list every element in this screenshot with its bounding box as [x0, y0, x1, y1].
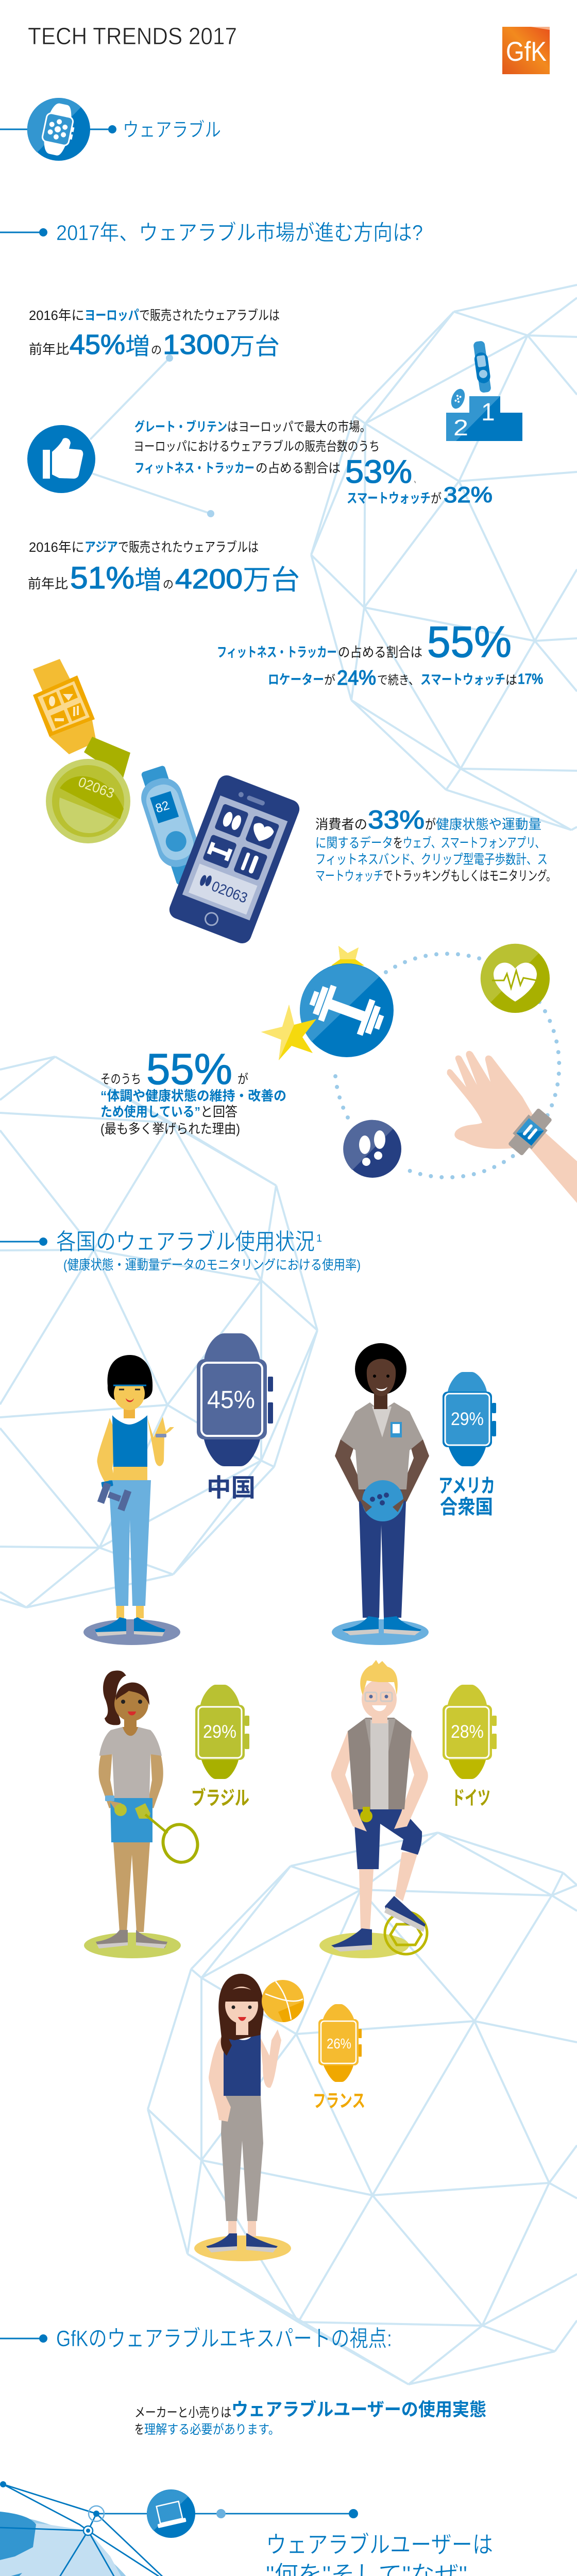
icon: podium with trackers: 1 — [481, 399, 495, 426]
icon: hand with watch — [447, 1051, 577, 1203]
chart: Brazil 29% — [191, 1685, 249, 1809]
section header: country usage — [0, 1229, 361, 1273]
person: China — [83, 1355, 180, 1645]
text: 55% health reason — [100, 1045, 286, 1137]
chart: USA 29%: アメリカ — [438, 1476, 495, 1497]
person: Germany — [319, 1660, 428, 1958]
icon: green clip tracker: 02063 — [76, 774, 116, 801]
text: fitness tracker 55%: スマートウォッチ — [420, 672, 505, 687]
stat: Europe: 増 — [125, 333, 150, 360]
stat: Asia: アジア — [84, 539, 118, 555]
title: TECH TRENDS 2017 — [28, 23, 237, 49]
text: fitness tracker 55%: の占める割合は — [338, 645, 422, 660]
text: Great Britain: 53% — [345, 454, 412, 490]
stat: Asia: で販売されたウェアラブルは — [118, 539, 259, 555]
icon: podium with trackers: 2 — [453, 415, 468, 440]
text: expert statement: メーカーと小売りは — [134, 2405, 231, 2420]
text: expert statement: を — [134, 2422, 144, 2437]
person: Brazil — [84, 1670, 202, 1958]
text: 33% of consumers: マートウォッチ — [315, 868, 383, 884]
stat: Europe: ヨーロッパ — [84, 308, 139, 323]
text: 33% of consumers: 消費者の — [315, 817, 367, 832]
text: Great Britain: はヨーロッパで最大の市場。 — [227, 420, 371, 434]
stat: Europe: で販売されたウェアラブルは — [139, 308, 280, 323]
chart: Germany 28%: 28% — [451, 1722, 484, 1742]
text: 33% of consumers: に関するデータ — [315, 835, 393, 851]
text: Great Britain: スマートウォッチ — [347, 490, 431, 506]
text: fitness tracker 55% — [217, 618, 543, 689]
chart: China 45%: 中国 — [207, 1475, 256, 1502]
icon: smartwatch — [27, 98, 90, 161]
text: 33% of consumers: 33% — [368, 805, 425, 834]
text: fitness tracker 55%: で続き、 — [377, 673, 419, 687]
chart: USA 29%: 29% — [451, 1409, 484, 1429]
text: 55% health reason: そのうち — [100, 1072, 141, 1087]
text: Great Britain: グレート・ブリテン — [134, 419, 227, 434]
text: Great Britain: ヨーロッパにおけるウェアラブルの販売台数のうち — [133, 439, 380, 454]
icon: blue fitness band: 82 — [154, 799, 171, 816]
icon: orange smartwatch — [33, 659, 96, 754]
stat: Asia: 万台 — [243, 565, 300, 596]
text: big question: ウェアラブルユーザーは — [266, 2531, 493, 2558]
text: 33% of consumers — [315, 805, 556, 884]
text: 55% health reason: ため使用している” — [100, 1104, 200, 1120]
text: 33% of consumers: を — [393, 835, 403, 851]
section header: 2017 direction: 2017年、ウェアラブル市場が進む方向は? — [56, 221, 423, 245]
text: fitness tracker 55%: 24% — [337, 667, 376, 689]
icon: thumbs up — [27, 425, 95, 493]
stat: Asia: 増 — [134, 566, 162, 595]
stat: Asia: の — [163, 578, 174, 591]
text: fitness tracker 55%: 17% — [518, 671, 543, 687]
section header: wearable — [0, 98, 221, 161]
stat: Europe — [29, 308, 280, 360]
stat: Europe: 万台 — [230, 333, 280, 360]
text: Great Britain: 、 — [414, 474, 418, 485]
illustration: globe network — [0, 2481, 495, 2576]
icon: dumbbell circle with stars — [261, 946, 394, 1060]
icon: blue fitness band — [133, 762, 209, 888]
chart: France 26%: フランス — [313, 2091, 365, 2111]
chart: China 45% — [197, 1333, 273, 1502]
text: expert statement — [134, 2399, 486, 2437]
text: 55% health reason: と回答 — [200, 1104, 237, 1120]
text: 55% health reason: (最も多く挙げられた理由) — [100, 1121, 240, 1137]
text: fitness tracker 55%: は — [505, 673, 517, 687]
text: Great Britain: フィットネス・トラッカー — [134, 461, 254, 476]
stat: Europe: の — [151, 344, 162, 357]
text: Great Britain: 32% — [444, 483, 493, 507]
text: Great Britain: の占める割合は — [256, 461, 341, 476]
section header: GfK expert: GfKのウェアラブルエキスパートの視点: — [56, 2326, 392, 2351]
chart: France 26%: 26% — [327, 2036, 351, 2052]
logo: GfK — [502, 27, 550, 74]
text: 55% health reason: 55% — [146, 1045, 232, 1093]
stat: Europe: 45% — [70, 329, 125, 360]
chart: Brazil 29%: ブラジル — [191, 1787, 249, 1809]
icon: phone: 02063 — [210, 878, 250, 906]
stat: Asia — [28, 539, 300, 596]
stat: Europe: 前年比 — [29, 342, 69, 357]
icon: podium with trackers — [446, 341, 522, 441]
text: Great Britain: が — [431, 492, 442, 506]
text: fitness tracker 55%: 55% — [427, 618, 512, 667]
text: 55% health reason: “体調や健康状態の維持・改善の — [100, 1088, 286, 1104]
icon: green clip tracker — [46, 737, 130, 843]
chart: USA 29% — [438, 1372, 496, 1518]
text: big question — [266, 2531, 513, 2576]
text: expert statement: ウェアラブルユーザーの使用実態 — [231, 2399, 486, 2420]
icon: heart circle — [481, 944, 550, 1013]
icon: footprints circle — [343, 1120, 401, 1178]
section header: country usage: 1 — [316, 1233, 322, 1244]
section header: wearable: ウェアラブル — [123, 120, 221, 141]
chart: Germany 28%: ドイツ — [452, 1788, 490, 1809]
stat: Asia: 2016年に — [29, 539, 84, 555]
chart: USA 29%: 合衆国 — [440, 1497, 493, 1518]
person: USA — [332, 1343, 429, 1645]
text: 33% of consumers: が — [425, 817, 436, 832]
stat: Europe: 2016年に — [29, 308, 84, 323]
text: 33% of consumers: 健康状態や運動量 — [436, 817, 541, 832]
icon: phone — [167, 773, 302, 946]
text: fitness tracker 55%: が — [324, 673, 335, 687]
text: 55% health reason: が — [237, 1072, 248, 1087]
chart: China 45%: 45% — [207, 1386, 255, 1414]
person: France — [194, 1974, 304, 2261]
text: fitness tracker 55%: フィットネス・トラッカー — [217, 645, 337, 660]
icon: laptop — [147, 2489, 195, 2538]
text: fitness tracker 55%: ロケーター — [268, 672, 324, 687]
dotted ring — [335, 954, 559, 1177]
stat: Europe: 1300 — [163, 329, 230, 360]
section header: country usage: (健康状態・運動量データのモニタリングにおける使用率) — [63, 1257, 361, 1273]
chart: Brazil 29%: 29% — [203, 1722, 236, 1742]
text: expert statement: 理解する必要があります。 — [144, 2422, 280, 2437]
stat: Asia: 4200 — [175, 564, 243, 595]
section header: country usage: 各国のウェアラブル使用状況 — [56, 1229, 315, 1255]
chart: France 26% — [313, 2004, 365, 2111]
logo: GfK: GfK — [506, 37, 547, 67]
text: Great Britain — [133, 419, 493, 507]
connector lines — [90, 354, 214, 517]
chart: Germany 28% — [443, 1685, 497, 1809]
stat: Asia: 51% — [70, 561, 134, 595]
stat: Asia: 前年比 — [28, 576, 68, 591]
